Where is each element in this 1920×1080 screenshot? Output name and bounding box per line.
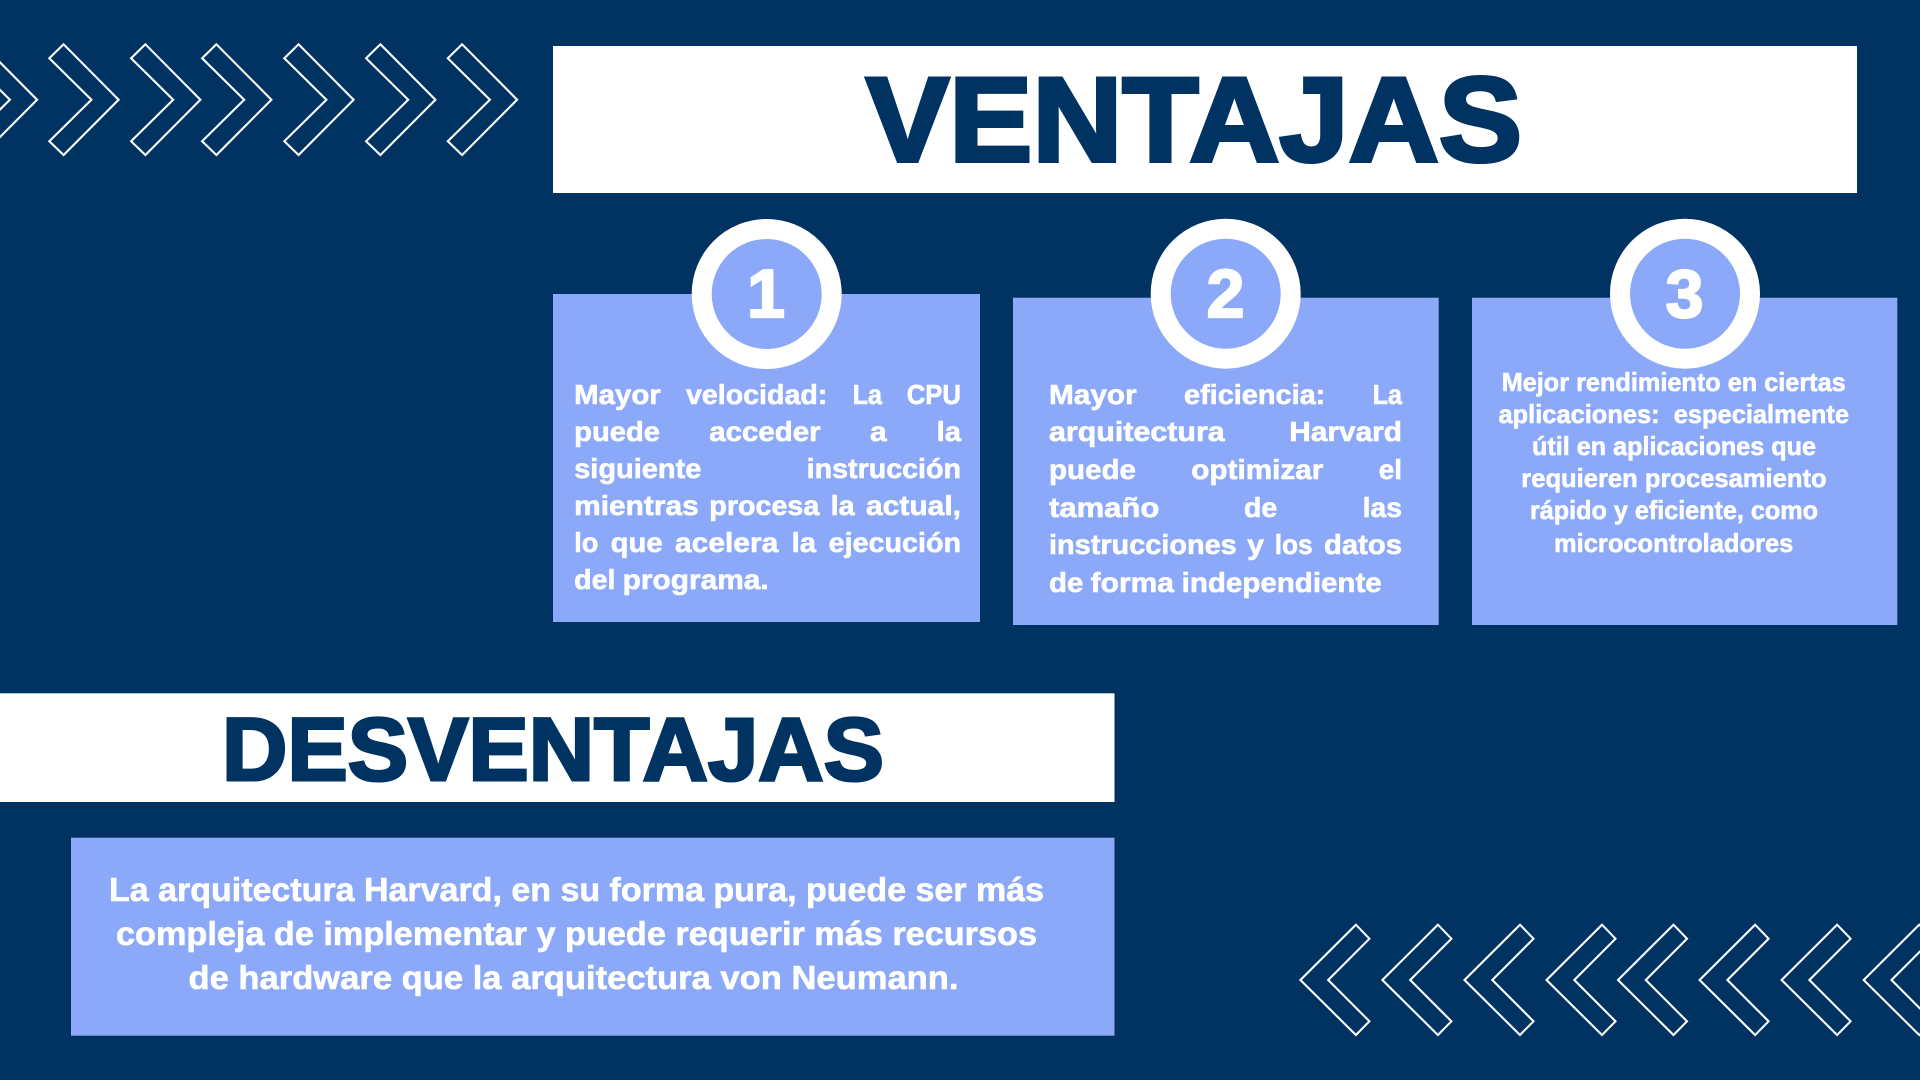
heading: VENTAJAS bbox=[553, 46, 1857, 193]
panel: ventaja 1 bbox=[553, 229, 980, 622]
icon: number 1 badge: 1 bbox=[747, 256, 785, 332]
text: mayor velocidad bbox=[574, 379, 961, 595]
text: mayor eficiencia: y bbox=[1247, 529, 1264, 560]
text: mayor eficiencia: optimizar bbox=[1191, 454, 1323, 485]
text: mayor velocidad: la bbox=[831, 490, 855, 521]
text: mayor eficiencia: arquitectura bbox=[1049, 416, 1225, 447]
text: mayor eficiencia: datos bbox=[1324, 529, 1402, 560]
text: desventaja description: de hardware que la arquitectura von Neumann. bbox=[188, 959, 958, 996]
icon: number 3 badge: 3 bbox=[1666, 256, 1703, 332]
text: mayor velocidad: la bbox=[937, 416, 961, 447]
icon: number 1 badge bbox=[702, 229, 832, 359]
text: mayor velocidad: instrucción bbox=[807, 453, 961, 484]
text: mayor velocidad: puede bbox=[574, 416, 660, 447]
text: mayor eficiencia: instrucciones bbox=[1049, 529, 1237, 560]
text: mejor rendimiento: útil en aplicaciones que bbox=[1532, 431, 1816, 461]
text: mayor velocidad: actual, bbox=[866, 490, 961, 521]
text: mayor velocidad: acelera bbox=[675, 527, 779, 558]
text: desventaja description: compleja de implementar y puede requerir más recursos bbox=[116, 915, 1037, 952]
text: mayor velocidad: programa. bbox=[623, 564, 769, 595]
text: mayor velocidad: lo bbox=[574, 527, 598, 558]
text: mayor eficiencia bbox=[1049, 379, 1402, 598]
text: mejor rendimiento bbox=[1498, 367, 1849, 558]
heading: DESVENTAJAS: DESVENTAJAS bbox=[222, 699, 884, 799]
text: desventaja description: La arquitectura Harvard, en su forma pura, puede ser más bbox=[109, 871, 1044, 908]
text: mejor rendimiento: Mejor rendimiento en ciertas bbox=[1502, 367, 1846, 397]
text: mayor velocidad: mientras bbox=[574, 490, 699, 521]
icon: chevrons pointing right, top left bbox=[0, 44, 517, 155]
text: mayor velocidad: que bbox=[611, 527, 663, 558]
text: mayor velocidad: CPU bbox=[907, 379, 961, 410]
text: mayor eficiencia: eficiencia: bbox=[1184, 379, 1325, 410]
text: mayor eficiencia: de bbox=[1049, 567, 1083, 598]
text: mejor rendimiento: aplicaciones: especialmente bbox=[1498, 399, 1849, 429]
text: mayor velocidad: Mayor bbox=[574, 379, 661, 410]
text: desventaja description bbox=[109, 871, 1044, 996]
icon: number 3 badge bbox=[1620, 229, 1750, 359]
panel: ventaja 2 bbox=[1013, 229, 1439, 625]
text: mayor velocidad: velocidad: bbox=[686, 379, 827, 410]
text: mayor velocidad: del bbox=[574, 564, 615, 595]
text: mayor eficiencia: Mayor bbox=[1049, 379, 1137, 410]
text: mejor rendimiento: microcontroladores bbox=[1554, 528, 1793, 558]
heading: DESVENTAJAS bbox=[0, 693, 1114, 802]
heading: VENTAJAS: VENTAJAS bbox=[866, 53, 1522, 187]
text: mayor velocidad: procesa bbox=[709, 490, 820, 521]
text: mayor eficiencia: los bbox=[1275, 529, 1313, 560]
text: mayor eficiencia: el bbox=[1379, 454, 1402, 485]
text: mayor eficiencia: La bbox=[1373, 379, 1402, 410]
text: mayor eficiencia: forma bbox=[1091, 567, 1174, 598]
text: mayor eficiencia: las bbox=[1363, 492, 1402, 523]
text: mayor velocidad: La bbox=[853, 379, 882, 410]
text: mayor velocidad: la bbox=[792, 527, 816, 558]
panel: ventaja 3 bbox=[1472, 229, 1897, 625]
text: mejor rendimiento: rápido y eficiente, como bbox=[1530, 495, 1818, 525]
text: mejor rendimiento: requieren procesamiento bbox=[1521, 463, 1827, 493]
text: mayor eficiencia: puede bbox=[1049, 454, 1136, 485]
text: mayor velocidad: siguiente bbox=[574, 453, 701, 484]
icon: number 2 badge bbox=[1161, 229, 1291, 359]
icon: chevrons pointing left, bottom right bbox=[1300, 925, 1920, 1035]
text: mayor velocidad: ejecución bbox=[829, 527, 961, 558]
text: mayor eficiencia: tamaño bbox=[1049, 492, 1159, 523]
text: mayor eficiencia: independiente bbox=[1182, 567, 1382, 598]
text: mayor eficiencia: Harvard bbox=[1289, 416, 1402, 447]
text: mayor eficiencia: de bbox=[1244, 492, 1277, 523]
icon: number 2 badge: 2 bbox=[1207, 256, 1244, 332]
panel: desventaja bbox=[71, 838, 1114, 1036]
text: mayor velocidad: a bbox=[870, 416, 887, 447]
text: mayor velocidad: acceder bbox=[709, 416, 821, 447]
